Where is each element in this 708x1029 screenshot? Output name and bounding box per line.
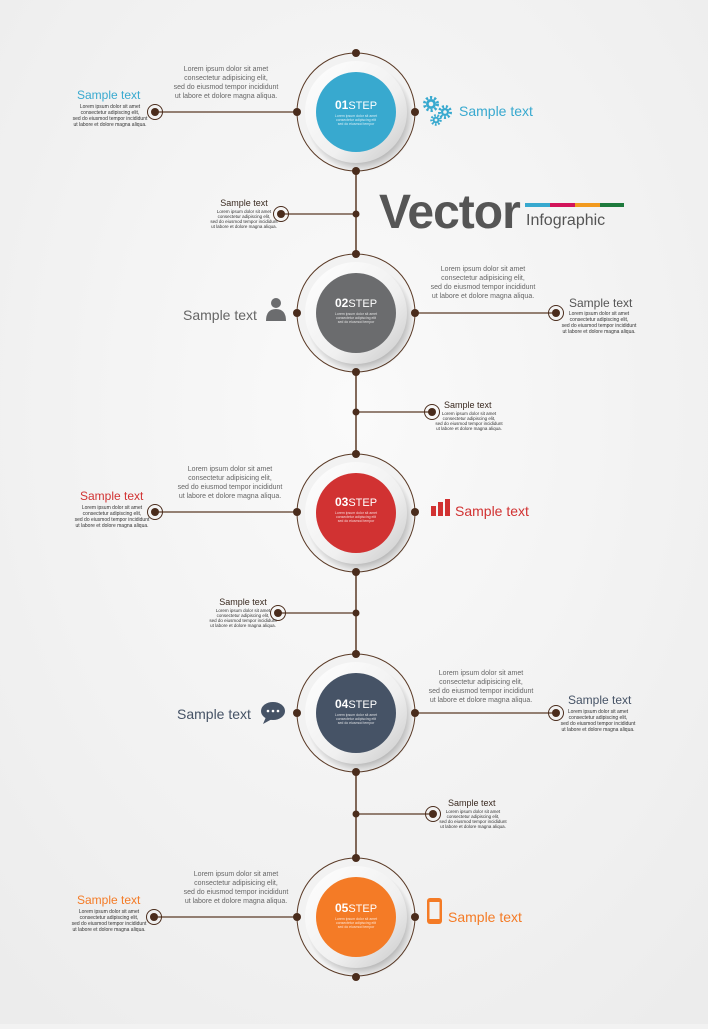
step 3: sed do eiusmod tempor incididunt — [178, 484, 282, 491]
step 5: 05STEP — [335, 901, 377, 915]
step 4: consectetur adipiscing elit, — [569, 715, 627, 721]
step 5: sed do eiusmod tempor incididunt — [184, 889, 288, 896]
step 3: consectetur adipiscing elit — [336, 515, 376, 519]
step 3: Lorem ipsum dolor sit amet — [82, 505, 143, 511]
step 2: sed do eiusmod tempor incididunt — [431, 284, 535, 291]
step 4: Sample text — [568, 693, 632, 707]
step 2: consectetur adipiscing elit, — [570, 317, 628, 323]
branch 2: consectetur adipiscing elit, — [443, 416, 495, 421]
title — [379, 186, 624, 239]
step 1: consectetur adipisicing elit, — [184, 75, 268, 82]
branch 4: Sample text — [448, 798, 496, 808]
step 1: Lorem ipsum dolor sit amet — [335, 114, 377, 118]
step 5 — [72, 854, 522, 981]
branch 2: Lorem ipsum dolor sit amet — [442, 411, 497, 416]
step 5: Lorem ipsum dolor sit amet — [335, 917, 377, 921]
branch 1: consectetur adipiscing elit, — [218, 214, 270, 219]
step 4: Sample text — [177, 706, 251, 722]
step 4: 04STEP — [335, 697, 377, 711]
step 2: Sample text — [569, 296, 633, 310]
step 5: Lorem ipsum dolor sit amet — [194, 871, 278, 878]
step 2: sed do eiusmod tempor incididunt — [562, 323, 637, 329]
step 3 — [75, 450, 529, 576]
step 3: Sample text — [455, 503, 529, 519]
step 3: sed do eiusmod tempor incididunt — [75, 517, 150, 523]
branch 3: Lorem ipsum dolor sit amet — [216, 608, 271, 613]
step 2: consectetur adipisicing elit, — [441, 275, 525, 282]
branch 1: Lorem ipsum dolor sit amet — [217, 209, 272, 214]
step 2: Lorem ipsum dolor sit amet — [441, 266, 525, 273]
branch 2: sed do eiusmod tempor incididunt — [435, 421, 503, 426]
step 5: consectetur adipiscing elit — [336, 921, 376, 925]
branch 1: Sample text — [220, 198, 268, 208]
step 3: ut labore et dolore magna aliqua. — [179, 493, 281, 500]
step 3: ut labore et dolore magna aliqua. — [75, 523, 149, 529]
step 3: Sample text — [80, 489, 144, 503]
step 1 — [73, 49, 533, 175]
step 4 — [177, 650, 636, 776]
branch 2: ut labore et dolore magna aliqua. — [436, 426, 502, 431]
step 4: Lorem ipsum dolor sit amet — [335, 713, 377, 717]
branch 4 — [352, 798, 507, 829]
branch 4: sed do eiusmod tempor incididunt — [439, 819, 507, 824]
step 4: sed do eiusmod tempor incididunt — [561, 721, 636, 727]
step 5: sed do eiusmod tempor — [338, 925, 375, 929]
branch 4: consectetur adipiscing elit, — [447, 814, 499, 819]
step 1: consectetur adipiscing elit — [336, 118, 376, 122]
step 1: consectetur adipiscing elit, — [81, 110, 139, 116]
step 5: sed do eiusmod tempor incididunt — [72, 921, 147, 927]
step 4: consectetur adipisicing elit, — [439, 679, 523, 686]
step 2 — [183, 250, 637, 376]
step 2: 02STEP — [335, 296, 377, 310]
step 1: sed do eiusmod tempor incididunt — [174, 84, 278, 91]
step 2: sed do eiusmod tempor — [338, 320, 375, 324]
timeline spine — [355, 52, 357, 977]
step 5: Lorem ipsum dolor sit amet — [79, 909, 140, 915]
branch 4: Lorem ipsum dolor sit amet — [446, 809, 501, 814]
step 1: 01STEP — [335, 98, 377, 112]
step 2: ut labore et dolore magna aliqua. — [432, 293, 534, 300]
step 3: Lorem ipsum dolor sit amet — [335, 511, 377, 515]
step 1: Lorem ipsum dolor sit amet — [80, 104, 141, 110]
step 5: Sample text — [77, 893, 141, 907]
step 5: Sample text — [448, 909, 522, 925]
step 2: Lorem ipsum dolor sit amet — [569, 311, 630, 317]
step 1: sed do eiusmod tempor incididunt — [73, 116, 148, 122]
step 2: Sample text — [183, 307, 257, 323]
step 4: consectetur adipiscing elit — [336, 717, 376, 721]
step 2: Lorem ipsum dolor sit amet — [335, 312, 377, 316]
branch 3: consectetur adipiscing elit, — [217, 613, 269, 618]
step 1: ut labore et dolore magna aliqua. — [175, 93, 277, 100]
step 3: consectetur adipisicing elit, — [188, 475, 272, 482]
branch 1: sed do eiusmod tempor incididunt — [210, 219, 278, 224]
branch 3 — [209, 597, 360, 628]
branch 2: Sample text — [444, 400, 492, 410]
branch 2 — [352, 400, 503, 431]
step 3: consectetur adipiscing elit, — [83, 511, 141, 517]
title: Infographic — [526, 212, 605, 229]
step 4: Lorem ipsum dolor sit amet — [439, 670, 523, 677]
step 4: sed do eiusmod tempor incididunt — [429, 688, 533, 695]
step 1: Sample text — [77, 88, 141, 102]
step 5: ut labore et dolore magna aliqua. — [72, 927, 146, 933]
step 4: ut labore et dolore magna aliqua. — [430, 697, 532, 704]
step 4: sed do eiusmod tempor — [338, 721, 375, 725]
step 5: consectetur adipiscing elit, — [80, 915, 138, 921]
branch 1 — [210, 198, 360, 229]
branch 4: ut labore et dolore magna aliqua. — [440, 824, 506, 829]
step 4: ut labore et dolore magna aliqua. — [561, 727, 635, 733]
step 1: Sample text — [459, 103, 533, 119]
step 1: Lorem ipsum dolor sit amet — [184, 66, 268, 73]
step 5: consectetur adipisicing elit, — [194, 880, 278, 887]
step 4: Lorem ipsum dolor sit amet — [568, 709, 629, 715]
step 3: Lorem ipsum dolor sit amet — [188, 466, 272, 473]
step 2: ut labore et dolore magna aliqua. — [562, 329, 636, 335]
step 3: sed do eiusmod tempor — [338, 519, 375, 523]
branch 1: ut labore et dolore magna aliqua. — [211, 224, 277, 229]
branch 3: ut labore et dolore magna aliqua. — [210, 623, 276, 628]
step 5: ut labore et dolore magna aliqua. — [185, 898, 287, 905]
branch 3: sed do eiusmod tempor incididunt — [209, 618, 277, 623]
branch 3: Sample text — [219, 597, 267, 607]
step 1: sed do eiusmod tempor — [338, 122, 375, 126]
step 3: 03STEP — [335, 495, 377, 509]
step 1: ut labore et dolore magna aliqua. — [73, 122, 147, 128]
title: Vector — [379, 186, 520, 239]
step 2: consectetur adipiscing elit — [336, 316, 376, 320]
